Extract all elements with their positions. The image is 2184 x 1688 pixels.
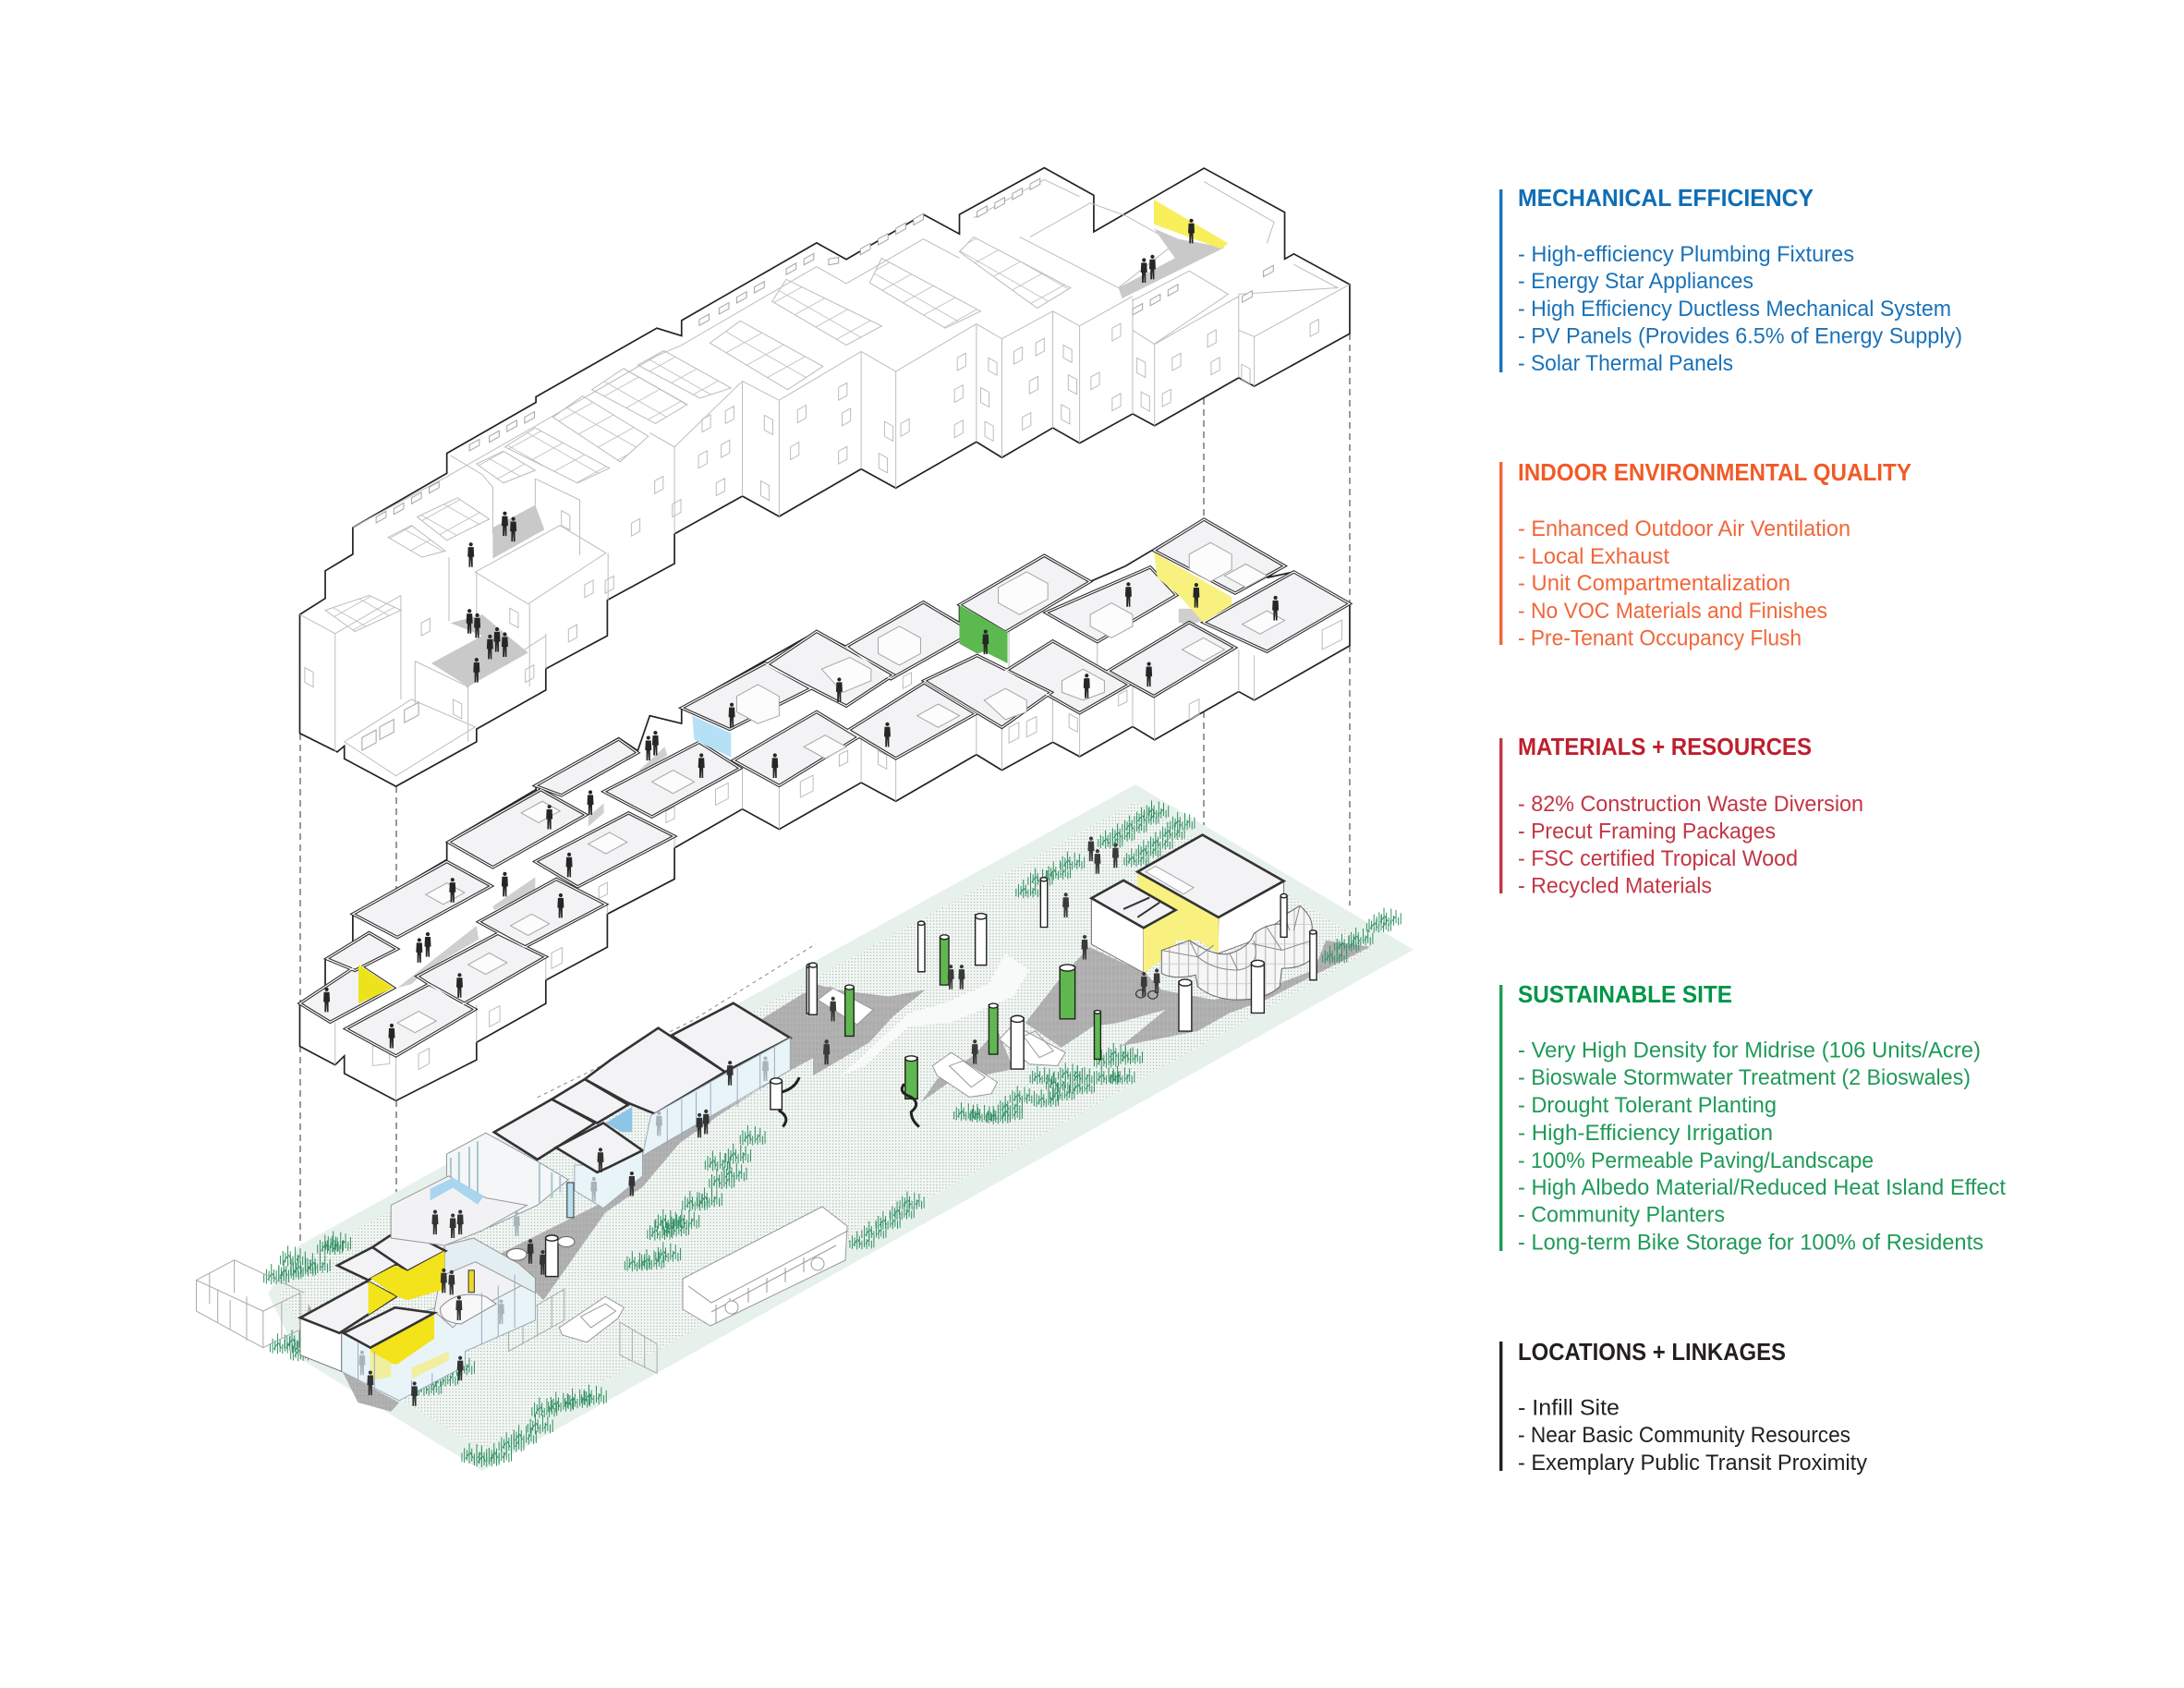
spiral ramp: [441, 1294, 496, 1324]
unit 9: [1108, 623, 1235, 697]
list: - High Albedo Material/Reduced Heat Island Effect: [1518, 1175, 2006, 1200]
unit 15: [448, 790, 586, 868]
unit 18: [479, 879, 606, 947]
corridor floors: [397, 609, 1228, 988]
people at community building: [367, 1040, 830, 1406]
section: materials and resources: [1499, 733, 1863, 898]
list: - High-Efficiency Irrigation: [1518, 1121, 1773, 1146]
rainwater pipe: [902, 1084, 919, 1127]
list: - Near Basic Community Resources: [1518, 1423, 1850, 1448]
list: - Very High Density for Midrise (106 Units/Acre): [1518, 1038, 1981, 1063]
people on site: [823, 837, 1160, 1064]
grass tufts: [264, 1125, 765, 1467]
bar orange: [1499, 462, 1502, 645]
room back right: [372, 1228, 445, 1271]
middle floor plan level: [299, 519, 1350, 1100]
unit 3: [960, 555, 1090, 632]
cafe tables: [507, 1236, 575, 1260]
lower glass mullions: [358, 1275, 515, 1395]
green bioswale columns: [845, 935, 1100, 1099]
blue wall: [605, 1107, 632, 1132]
small room partition: [1123, 897, 1159, 917]
bright yellow stair wall: [358, 965, 394, 1003]
inner white line of double walls: [299, 519, 1350, 1056]
unit 13: [604, 742, 740, 817]
unit 8: [1005, 641, 1129, 713]
solar panels: [325, 237, 1071, 631]
roof and walls silhouette: [299, 168, 1350, 786]
yellow core wall: [1154, 553, 1232, 623]
cars: [818, 989, 1065, 1097]
room fixtures: [397, 542, 1285, 1033]
list: [1518, 1038, 2006, 1255]
unit 16: [535, 813, 674, 887]
shadow behind car: [921, 1029, 1013, 1102]
bar red: [1499, 738, 1502, 893]
floor silhouette: [299, 519, 1350, 1100]
bar green: [1499, 985, 1502, 1251]
small room: [1091, 880, 1175, 928]
ground: site plane: [268, 784, 1414, 1471]
bicycle: [1136, 990, 1158, 999]
plaza at the entry: [300, 1304, 399, 1412]
bar blue: [1499, 189, 1502, 372]
top end room: [672, 1003, 790, 1072]
blue wall bench: [431, 1178, 484, 1205]
glass stripes left wing: [451, 1141, 560, 1203]
street white patch: [841, 953, 1029, 1075]
community building right: [1091, 835, 1284, 973]
blue wall: [692, 716, 731, 758]
community building: [300, 1003, 790, 1401]
list: - Solar Thermal Panels: [1518, 351, 1733, 376]
wall of cube: [1218, 881, 1284, 953]
plaza shadow right: [1025, 941, 1370, 1048]
unit 12: [734, 711, 858, 785]
list: - 100% Permeable Paving/Landscape: [1518, 1148, 1874, 1173]
list: - 82% Construction Waste Diversion: [1518, 792, 1863, 817]
list: [1518, 516, 1850, 650]
heading: INDOOR ENVIRONMENTAL QUALITY: [1518, 458, 1911, 486]
roof and wall lines: [299, 285, 1350, 752]
list: - Energy Star Appliances: [1518, 269, 1753, 294]
section: indoor environmental quality: [1499, 458, 1911, 650]
left wing interior: [446, 1133, 568, 1227]
big room: [494, 1099, 595, 1160]
green wall: [960, 605, 1008, 663]
left cube wall: [1091, 898, 1144, 973]
gray terrace upper: [492, 505, 544, 559]
section: sustainable site: [1499, 980, 2006, 1255]
unit 22: [327, 933, 397, 970]
fence: [196, 1260, 657, 1373]
list: [1518, 1395, 1867, 1475]
room lower left: [300, 1281, 396, 1333]
list: [1518, 792, 1863, 898]
kitchen glass box: [575, 1150, 643, 1208]
unit 1: [1154, 519, 1285, 593]
unit 11: [848, 683, 976, 759]
list: - Local Exhaust: [1518, 544, 1669, 569]
section: mechanical efficiency: [1499, 184, 1962, 376]
list: - Infill Site: [1518, 1395, 1620, 1421]
list: - Unit Compartmentalization: [1518, 571, 1790, 596]
yellow wall small: [1144, 910, 1175, 973]
heading: MATERIALS + RESOURCES: [1518, 733, 1812, 760]
list: - Bioswale Stormwater Treatment (2 Bioswales): [1518, 1065, 1971, 1090]
lobby floor: [434, 1238, 535, 1328]
heading: LOCATIONS + LINKAGES: [1518, 1338, 1786, 1366]
list: - Community Planters: [1518, 1203, 1725, 1227]
yellow walls: [369, 1251, 444, 1364]
room lower right: [344, 1307, 434, 1348]
site dashed outline: [538, 944, 816, 1098]
unit 4: [1046, 567, 1176, 642]
wall lines: [335, 632, 1255, 1100]
list: - Drought Tolerant Planting: [1518, 1093, 1777, 1118]
yellow wall top: [1154, 200, 1228, 249]
list: - High-efficiency Plumbing Fixtures: [1518, 242, 1854, 267]
unit 14: [535, 739, 637, 795]
bar black: [1499, 1342, 1502, 1471]
unit 7: [682, 663, 811, 729]
sustainability legend: [1499, 184, 2006, 1475]
white end wall: [300, 1318, 342, 1371]
unit 6: [767, 631, 893, 706]
unit rooms: [299, 519, 1350, 1056]
long glass facade: [643, 1038, 790, 1156]
unit 17: [353, 861, 491, 938]
unit 5: [846, 602, 974, 679]
top roof level: [299, 168, 1350, 786]
list: - FSC certified Tropical Wood: [1518, 846, 1798, 871]
lounge floor: [391, 1176, 528, 1245]
list: - Pre-Tenant Occupancy Flush: [1518, 626, 1802, 650]
room 2: [552, 1079, 628, 1123]
canopy drums: [1161, 905, 1312, 1000]
parapet and mechanical curbs along the roof edge: [345, 179, 1338, 776]
wall windows: [305, 320, 1318, 719]
windows of middle floor: [372, 620, 1342, 1070]
list: - High Efficiency Ductless Mechanical System: [1518, 297, 1951, 322]
glass curtain wall lower: [342, 1264, 535, 1401]
list: - No VOC Materials and Finishes: [1518, 599, 1827, 624]
stair niche: [1146, 866, 1194, 894]
yellow wall large: [1137, 872, 1219, 953]
heading: SUSTAINABLE SITE: [1518, 980, 1732, 1008]
dashed projection lines: [300, 334, 1350, 1289]
unit 10: [924, 655, 1051, 727]
large room: [1137, 835, 1284, 917]
list: - PV Panels (Provides 6.5% of Energy Supply): [1518, 323, 1962, 349]
list: - Precut Framing Packages: [1518, 819, 1776, 844]
ground details in right half of site: [813, 800, 1401, 1249]
ghost people behind glass: [358, 1056, 769, 1375]
room back: [337, 1247, 401, 1281]
section: locations and linkages: [1499, 1338, 1867, 1475]
list: [1518, 242, 1962, 376]
glass mullions: [667, 1046, 774, 1147]
heading: MECHANICAL EFFICIENCY: [1518, 184, 1814, 212]
list: - Enhanced Outdoor Air Ventilation: [1518, 516, 1850, 541]
list: - Exemplary Public Transit Proximity: [1518, 1451, 1867, 1475]
gray terrace right: [1119, 228, 1225, 298]
ground details in left half of site: [196, 944, 831, 1467]
upper long room: [585, 1028, 725, 1114]
columns: [809, 878, 1316, 1069]
plaza shadow left: [813, 983, 925, 1075]
pale yellow glass band: [370, 1352, 391, 1380]
pale yellow glass band 2: [412, 1352, 449, 1378]
unit 20: [346, 984, 475, 1056]
roof people: [467, 219, 1195, 683]
car on street: [559, 1296, 624, 1342]
glass north wall: [444, 1238, 535, 1293]
unit 2: [1204, 572, 1350, 651]
gray terrace lower: [431, 614, 528, 686]
plaza strip along community building: [498, 986, 831, 1300]
right end of site: building, canopy, columns: [809, 835, 1316, 1127]
list: - Long-term Bike Storage for 100% of Residents: [1518, 1231, 1984, 1255]
kitchen block: [556, 1123, 643, 1172]
lobby columns: [468, 964, 817, 1293]
people on the floor: [323, 582, 1279, 1049]
roof rooftop units: [362, 178, 1273, 750]
unit 19: [418, 933, 546, 1005]
grass tufts: [850, 800, 1401, 1249]
list: - Recycled Materials: [1518, 874, 1712, 898]
school bus: [683, 1207, 848, 1326]
unit 21: [299, 965, 394, 1022]
canopy roof spokes: [1161, 905, 1312, 970]
